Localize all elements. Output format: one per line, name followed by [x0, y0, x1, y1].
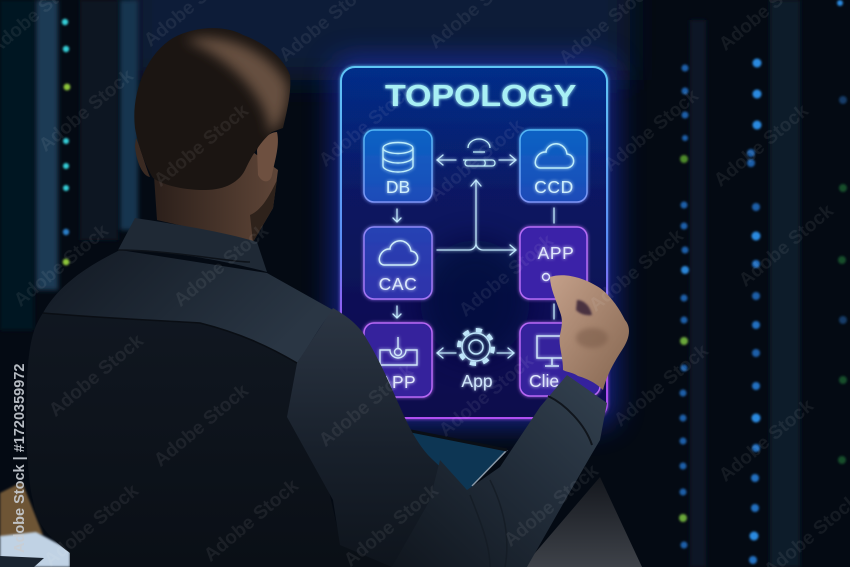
watermarks: Adobe Stock: [715, 395, 818, 486]
node: CCD: [520, 130, 587, 202]
icon: link hub: [463, 139, 495, 166]
forearm: [392, 375, 607, 567]
person: neck and head: [134, 28, 290, 242]
panel: holographic topology screen: [332, 58, 616, 426]
right ear: [257, 132, 278, 181]
watermarks: Adobe Stock: [150, 380, 253, 471]
node: APP centre right: [520, 227, 587, 299]
watermarks: Adobe Stock: [10, 220, 113, 311]
watermarks: Adobe Stock: [435, 350, 538, 441]
collar: [118, 218, 267, 272]
node: APP centre right: APP: [538, 243, 574, 263]
watermarks: Adobe Stock: [585, 225, 688, 316]
watermarks: Adobe Stock: [150, 100, 253, 191]
watermarks: Adobe Stock: [200, 475, 303, 566]
yoke: [43, 250, 333, 363]
watermarks: Adobe Stock: [710, 100, 813, 191]
hair: [134, 28, 290, 190]
node: CAC: CAC: [379, 274, 417, 294]
node: DB: DB: [386, 177, 410, 197]
finger gap: [576, 300, 592, 315]
node: Client: Clie: [529, 371, 559, 391]
stock id label: Adobe Stock | #1720359972: [12, 364, 28, 553]
node: APP bottom left: APP: [380, 372, 416, 392]
left ear: [135, 138, 150, 177]
person: hand pinching screen: [550, 275, 629, 390]
label: App: App: [461, 371, 493, 391]
icon: gear: [459, 330, 493, 364]
icon: monitor: [537, 336, 567, 366]
watermarks: Adobe Stock: [170, 220, 273, 311]
node: Client: [520, 323, 600, 396]
desk and paper: [0, 482, 70, 567]
watermarks: Adobe Stock: [315, 360, 418, 451]
watermarks: Adobe Stock: [600, 85, 703, 176]
floor: [337, 477, 642, 567]
yoke seam: [43, 313, 297, 363]
icon: database: [383, 142, 413, 172]
node: APP bottom left: [364, 323, 432, 397]
icon: network port: [380, 337, 417, 365]
node: CCD: CCD: [534, 177, 574, 197]
watermarks: Adobe Stock: [315, 80, 418, 171]
watermarks: Adobe Stock: [735, 200, 838, 291]
watermarks: Adobe Stock: [425, 115, 528, 206]
neck: [154, 150, 278, 242]
panel frame: [341, 67, 607, 418]
icon: cloud: [379, 241, 418, 265]
upper sleeve: [287, 308, 467, 567]
icon: cloud: [535, 144, 574, 168]
panel glow: [332, 58, 616, 426]
beard: [250, 180, 277, 242]
person: dark shirt: [26, 218, 607, 567]
watermarks: Adobe Stock: [35, 65, 138, 156]
watermarks: Adobe Stock: [610, 340, 713, 431]
torso: [26, 250, 392, 567]
tablet: [411, 431, 507, 492]
title: TOPOLOGY: [385, 78, 577, 113]
node: DB: [364, 130, 432, 202]
node: CAC: [364, 227, 432, 299]
hair highlight: [185, 37, 288, 135]
watermarks: Adobe Stock: [45, 330, 148, 421]
watermarks: Adobe Stock: [500, 460, 603, 551]
arrows: [393, 155, 554, 358]
watermarks: Adobe Stock: [455, 230, 558, 321]
